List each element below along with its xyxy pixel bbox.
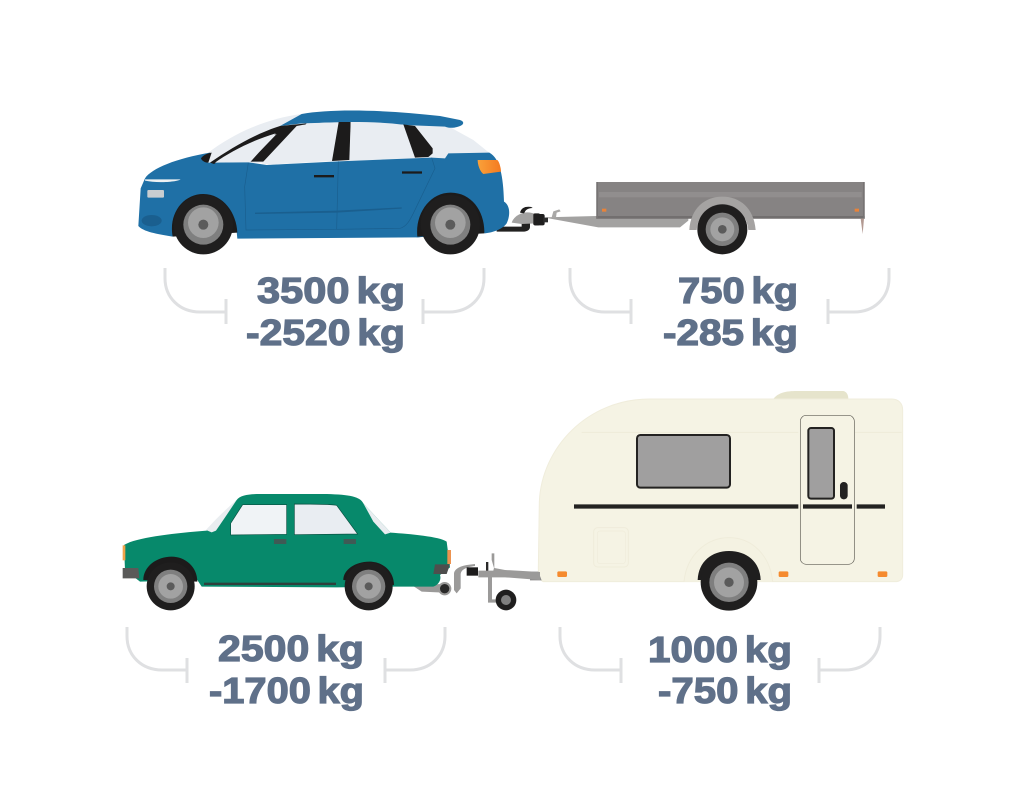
text: blue car weights: -2520 kg <box>246 312 405 353</box>
text: green car weights: 2500 kg <box>218 628 364 669</box>
front window <box>262 122 338 165</box>
bracket: flatbed trailer weight <box>570 268 889 324</box>
text: flatbed trailer weights: 750 kg <box>678 270 798 311</box>
green body <box>124 494 450 587</box>
car body <box>138 153 509 239</box>
front door window <box>231 505 287 535</box>
text: blue car weights <box>246 270 405 353</box>
caravan wheel <box>698 551 761 580</box>
rear lower body <box>413 210 485 237</box>
tow coupling <box>512 214 535 223</box>
marker lights <box>557 571 567 577</box>
hitch <box>412 584 443 593</box>
text: flatbed trailer weights: -285 kg <box>663 312 798 353</box>
tow bar <box>497 223 530 232</box>
door <box>800 415 854 564</box>
bracket: caravan weight <box>560 627 880 683</box>
text: green car weights <box>209 628 364 711</box>
trailer mudguard <box>689 197 756 230</box>
b pillar <box>332 122 351 161</box>
upper seam <box>582 431 902 434</box>
rear window <box>350 122 415 160</box>
door handles <box>274 539 286 544</box>
lamps <box>123 545 125 560</box>
text: green car weights: -1700 kg <box>209 670 364 711</box>
trailer: flatbed <box>512 182 865 254</box>
car: blue hatchback <box>138 111 540 254</box>
window <box>637 435 730 488</box>
text: caravan weights: 1000 kg <box>648 629 792 670</box>
drawbar <box>478 553 540 580</box>
text: flatbed trailer weights <box>663 270 798 353</box>
rear door window <box>294 504 358 535</box>
caravan body <box>538 399 903 582</box>
windows backing <box>207 114 490 164</box>
wheel arches <box>143 557 394 585</box>
car: green sedan with hitch <box>123 494 540 610</box>
door handle <box>840 482 848 499</box>
door window <box>808 428 834 499</box>
jockey wheel <box>488 577 505 603</box>
door seams <box>245 158 435 230</box>
hatch <box>594 528 628 567</box>
daylight running light <box>145 179 181 182</box>
bumpers <box>123 568 139 578</box>
stripe <box>574 504 885 509</box>
roof vent <box>773 391 848 399</box>
wheel arch <box>684 538 773 582</box>
sill <box>204 583 336 585</box>
door handles <box>314 171 422 177</box>
front wheel <box>147 562 195 610</box>
windshield pillars <box>210 123 307 164</box>
trailer box <box>596 182 865 219</box>
bracket: green car weight <box>127 627 445 683</box>
text: blue car weights: 3500 kg <box>257 270 405 311</box>
trailer wheel <box>697 204 747 254</box>
wheel arches <box>172 193 484 237</box>
headlight <box>147 190 164 198</box>
windshield rear <box>363 503 391 534</box>
quarter window <box>215 133 276 163</box>
roof spoiler <box>280 111 463 128</box>
trailer rear support <box>861 219 864 234</box>
body crease <box>255 207 402 214</box>
text: caravan weights <box>648 629 792 711</box>
front wheel <box>174 195 233 254</box>
text: caravan weights: -750 kg <box>658 670 792 711</box>
rear wheel <box>421 195 480 254</box>
trailer lights <box>602 209 606 212</box>
draw bar end <box>530 572 542 580</box>
tail lamp <box>478 160 501 174</box>
rear wheel <box>345 562 393 610</box>
trailer drawbar <box>543 216 688 227</box>
windshield front <box>206 500 237 532</box>
caravan <box>530 391 903 611</box>
bracket: blue car weight <box>165 268 484 324</box>
fog recess <box>142 215 162 226</box>
rear pillar <box>403 124 433 158</box>
